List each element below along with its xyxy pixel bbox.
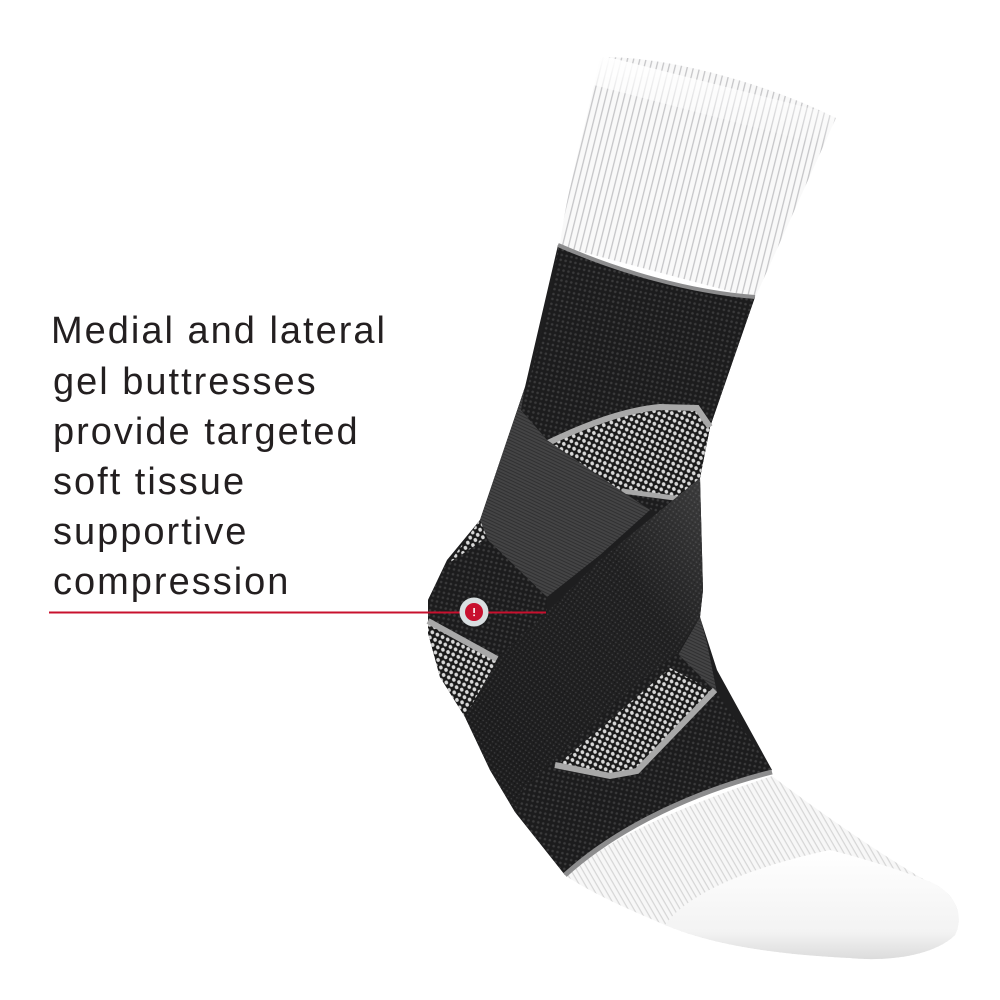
- ankle sleeve: [428, 245, 772, 875]
- upper heel mesh: [449, 520, 488, 563]
- sleeve cuff trim: [558, 245, 755, 297]
- callout text: compression: [53, 561, 290, 603]
- grey crossing band: [480, 387, 650, 597]
- callout text: [51, 310, 387, 603]
- foot sock: [566, 776, 959, 959]
- upper sleeve body: [521, 245, 755, 515]
- lower sleeve body: [515, 653, 772, 875]
- grey band lower right: [677, 617, 717, 693]
- lower heel mesh gel panel: [428, 620, 498, 717]
- callout text: provide targeted: [53, 411, 360, 453]
- upper mesh gel panel: [548, 407, 710, 500]
- lower cuff trim: [565, 772, 772, 875]
- callout text: gel buttresses: [53, 361, 318, 403]
- callout text: soft tissue: [53, 461, 246, 503]
- callout leader line and marker: [49, 598, 546, 626]
- callout text: Medial and lateral: [51, 310, 387, 352]
- heel sleeve body: [428, 537, 547, 660]
- lower mesh gel panel: [555, 668, 715, 777]
- leg sock: [560, 54, 840, 298]
- callout text: supportive: [53, 511, 248, 553]
- sleeve silhouette base: [428, 245, 772, 875]
- velcro strap: [465, 478, 703, 812]
